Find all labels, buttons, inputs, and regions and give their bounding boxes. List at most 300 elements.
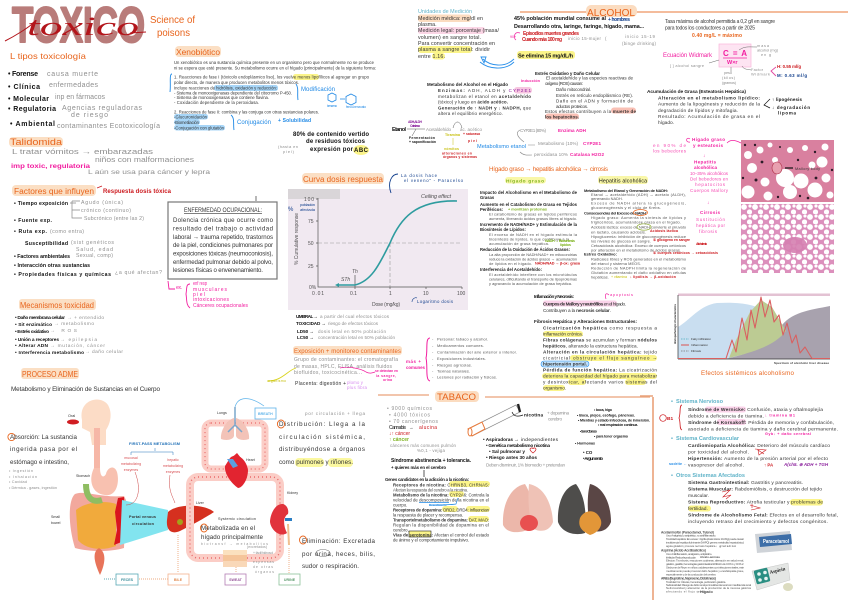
panel: fibrosis hepatica: hepáticos, alterando la estructura hepática. (543, 344, 638, 348)
panel: tasa maxima de alcohol y ecuacion de Widmark: (kilos) (722, 75, 736, 80)
notes: nicotina: cerebro (548, 416, 562, 422)
panel: factores que influyen: crónico (continuo) (81, 208, 131, 214)
text block: metabolizada: expensas (253, 560, 274, 564)
panel: xenobiotico: 1. Reacciones de fase I (tóxicolo endoplásmico liso), los vuelve menos lipofílicos al agregar un grupo (174, 74, 370, 80)
list: fuentes de exposicion: - (432, 374, 434, 380)
panel: exposicion y monitoreo contaminantes: organismo (267, 379, 286, 383)
portal venous circulation: circulation (132, 522, 155, 526)
text block: farmacos analgesicos: Efectos: Trombosis, reacciones cutáneas, alteración en salud renal, (666, 558, 744, 562)
list: umbral toxicidad: LC50 → (297, 335, 314, 340)
notes: progresion higado graso a cirrosis: ↓ (703, 153, 705, 158)
panel: estres oxidativo: Estos efectos contribuyen a la muerte de (545, 109, 636, 114)
panel: genes candidatos (385, 477, 490, 542)
notes: progresion higado graso a cirrosis: Cuerpos Mallory (690, 188, 729, 193)
output boxes: BILE (174, 578, 183, 582)
notes: progresion higado graso a cirrosis: y esteatosis (693, 143, 723, 148)
list: fuentes de exposicion (406, 336, 517, 381)
title: Toxico: toxico (27, 12, 139, 41)
chart: curva dosis respuesta: 0.01 (312, 291, 324, 297)
panel: acumulacion de grasa: degradación de lípidos y mitofagia. (658, 108, 738, 114)
text block: absorcion: • Cavidad (9, 480, 27, 484)
panel: hepatitis alcoholica: Cetoacidosis alcohólica: Exceso de cuerpos cetónicos (591, 243, 686, 248)
skin (223, 550, 247, 567)
chart: curva dosis respuesta: 100 (457, 291, 466, 297)
panel: hepatitis alcoholica: los niveles de glucosa en sangre. (591, 238, 651, 244)
chart: curva dosis respuesta: 0% (309, 285, 317, 291)
panel: tipos toxicologia (8, 51, 160, 130)
panel: inflamacion y necrosis: Contribuyen a la necrosis celular. (543, 308, 611, 313)
panel: genes candidatos: de ánimo y el comportamiento impulsivo. (393, 538, 469, 542)
panel: tasa maxima de alcohol y ecuacion de Widmark (663, 19, 807, 85)
panel: hepatitis alcoholica: Acidosis láctica (650, 229, 679, 233)
panel: xenobiotico: Incluye reacciones de hidrólisis, oxidación y reducción: (174, 86, 277, 90)
first-pass metabolism: metabolizing (121, 462, 141, 466)
heading: efectos sistemicos alcoholismo: Efectos sistémicos alcoholismo (701, 370, 795, 377)
annotation: ejemplos ocupacionales: musculares (193, 287, 228, 293)
chart: spectrum of alcoholic liver disease: Fatty infiltration (691, 337, 711, 341)
panel: higado graso: Interferencia del Acetaldehído: (480, 267, 542, 272)
panel: inflamacion y necrosis (534, 292, 633, 313)
callout: enfermedad ocupacional: de la piel, condiciones pulmonares por (173, 242, 273, 249)
chart: spectrum of alcoholic liver disease (673, 294, 830, 365)
notes: progresion higado graso a cirrosis (653, 137, 741, 234)
text block: metabolizada: Metabolizada en el (201, 525, 255, 532)
panel: tipos toxicologia: • Regulatoria (8, 106, 56, 113)
panel: higado graso: Incremento de NADH/NAD+ y Estimulación de la (480, 222, 578, 227)
sistema nervioso (660, 399, 838, 436)
notes: cancer y organos: • CO (583, 450, 593, 455)
image: caja de aspirina (752, 563, 793, 591)
diagram: etanol pathway: Metabolismo (10%) (538, 141, 578, 146)
panel: acumulacion de grasa: Resultado: Acumulación de grasa en el (658, 114, 760, 120)
panel: higado graso: NADH → Biosíntesis (545, 239, 575, 243)
panel: unidades de medicion: Unidades de Medición (418, 9, 472, 15)
text block: distribucion: circulación sistémica, (279, 434, 365, 441)
notes: progresion higado graso a cirrosis: Cirrosis (700, 210, 720, 215)
panel: fibrosis hepatica: inflamación crónica. (543, 332, 583, 336)
panel: hepatitis alcoholica: Metabolismo del Etanol y Generación de NADH: (584, 188, 668, 193)
panel: hepatitis alcoholica: ① cuerpos cetónicos → cetoacidosis (653, 250, 718, 255)
text block: farmacos analgesicos: Inhibición: Reduce la producción (666, 556, 696, 560)
panel: tasa maxima de alcohol y ecuacion de Widmark: [ ] alcohol sangre (670, 63, 704, 68)
panel: hepatitis alcoholica: Reducción de NADPH limita la regeneración de (591, 266, 686, 270)
diagram: ADME anatomy (51, 399, 300, 585)
panel: estres oxidativo: Estrés en retículo endoplásmico (RE). (556, 93, 633, 98)
panel: xenobiotico: - Coxidación dependiente de la peroxidasa. (174, 100, 259, 105)
sistema nervioso: B1 (667, 416, 673, 422)
panel: higado graso: aumenta, liberando ácidos grasos libres al hígado. (489, 216, 577, 221)
panel: acumulacion de grasa: hígado. (658, 120, 674, 126)
text block: farmacos analgesicos: Toxicidad Hepática: En exceso >4g/día (dosis tóxica: 10-15g) puede causar (666, 537, 744, 541)
list: fuentes de exposicion: Contaminación del aire exterior o interior. (437, 350, 517, 354)
heading: metabolismo y eliminacion: Metabolismo y Eliminación de Sustancias en el Cuerpo (11, 386, 160, 393)
diagram: etanol pathway: ác. acético (460, 127, 483, 132)
heart: Heart (246, 458, 255, 462)
panel: tipos toxicologia: de riesgo (71, 112, 108, 119)
panel: hepatitis alcoholica: Glutatión aumentando el daño oxidativo en células (591, 270, 686, 275)
notes: cancer y organos: • Mientras y estado infecciosa, de inmersión. (578, 418, 650, 422)
image: histologia higado graso: Mallory body (795, 167, 820, 171)
text block: metabolizada: órganos (255, 570, 274, 574)
text block: farmacos analgesicos (661, 530, 751, 594)
sistema nervioso: Síndrome de Wernicke: Confusión, ataxia y oftalmoplejía (688, 407, 823, 413)
panel: xenobiotico: + Solubilidad (278, 118, 311, 124)
panel: xenobiotico: Conjugación (237, 120, 271, 126)
sistema cardiovascular: ↑ PA (764, 462, 774, 468)
heading: tabaco: TABACO (437, 392, 476, 402)
chart: curva dosis respuesta: Curva dosis respuesta (303, 175, 384, 184)
list: fuentes de exposicion: más + (406, 359, 421, 364)
panel: mecanismos toxicidad: → metabolismo (54, 321, 94, 327)
callout: enfermedad ocupacional: laboral → trauma repetido, trastornos (173, 234, 273, 241)
text block: farmacos analgesicos: Nefrotoxicidad: Riesgo de daño renal por insuficiencia renal con insuficiencia renal (666, 583, 751, 587)
notes: tabaco quimicos: • 70 cancerígenos (389, 419, 438, 425)
panel: unidades de medicion: volumen) en sangre total. (418, 35, 481, 41)
panel: fibrosis hepatica: Fibras colágenas se acumulan y forman nódulos (543, 338, 657, 342)
panel: higado graso: Hígado graso (506, 178, 544, 184)
panel: higado graso: El exceso de NADH en el hígado estimula la (489, 232, 578, 237)
panel: exposicion y monitoreo contaminantes: plus fibra (347, 385, 368, 390)
callout: enfermedad ocupacional: lesiones físicas o envenenamiento. (173, 267, 263, 274)
panel: higado graso: Periféricos: (480, 207, 503, 212)
icon: cigarette (468, 404, 520, 436)
list: fuentes de exposicion: Exposiciones industriales. (437, 356, 486, 361)
notes: progresion higado graso a cirrosis: Hepatitis (694, 160, 716, 164)
first-pass metabolism: metabolizing (163, 464, 183, 468)
chart: curva dosis respuesta: Th (352, 269, 358, 275)
annotation: ejemplos ocupacionales: piel (193, 292, 205, 298)
panel: hepatitis alcoholica: Acidosis láctica: exceso de NADH convierte el piruvato (591, 224, 686, 230)
panel: acumulacion de grasa: ↑ lipogénesis (772, 97, 803, 102)
image: caja de paracetamol (755, 531, 792, 553)
chart: spectrum of alcoholic liver disease: Fibrosis (691, 349, 702, 353)
subtitle: science of poisons (150, 14, 195, 39)
text block: absorcion: • Ingestión (9, 469, 33, 473)
sistema cardiovascular: Hipertensión: Aumento de la presión arterial por el efecto (688, 456, 828, 462)
sistema nervioso: ↓ tiamina B1 (765, 414, 795, 418)
lungs (217, 399, 276, 440)
panel: xenobiotico: Un xenobiótico es una sustancia química presente en un organismo pero que normalmente no se produce (174, 60, 375, 65)
text block: farmacos analgesicos: Toxicidad: Gi: Úlceras, hemorragia, perforación gástrica. (666, 580, 726, 584)
diagram: etanol pathway: Metabolismo etanol (477, 144, 526, 150)
subtitle: science of poisons: Science of (150, 14, 195, 26)
panel: exposicion y monitoreo contaminantes: Placenta: digestión + (295, 381, 346, 387)
text block: eliminacion: sudor o respiración. (302, 563, 359, 570)
panel: mecanismos toxicidad: → daño celular (85, 349, 123, 355)
digestive tract: Small (51, 515, 60, 519)
panel: factores que influyen (12, 185, 172, 278)
sistema nervioso: asociado a deficiencia de tiamina y daño cerebral permanente. (688, 426, 838, 432)
panel: hepatitis alcoholica: en lactato, causando acidosis. (591, 230, 646, 234)
panel: unidades de medicion: Medición legal: porcentaje (masa/ (418, 28, 500, 34)
kidney (270, 491, 298, 545)
panel: acumulacion de grasa (647, 89, 810, 126)
callout: enfermedad ocupacional: resultado del trabajo o actividad (173, 226, 273, 232)
panel: tasa maxima de alcohol y ecuacion de Widmark: M: 0.63 ml/g (777, 73, 807, 78)
text block: farmacos analgesicos: Síndrome de Reye: en niños y adolescentes con infecciones virales, este (666, 566, 744, 570)
panel: talidomida: L aún se usa para cáncer y lepra (88, 169, 210, 176)
panel: hepatitis alcoholica: gluconeogénesis y el ciclo de Krebs. (591, 205, 661, 210)
text block: farmacos analgesicos: agota glutatión; provoca necrosis hepática. (666, 544, 716, 548)
heading: tabaco (378, 391, 653, 600)
panel: higado graso: La alta proporción de NADH/NAD+ en mitocondrias (489, 252, 577, 257)
panel: exposicion y monitoreo contaminantes: Grupo de contaminantes: el cromatografía (294, 357, 398, 363)
list: umbral toxicidad: a partir del cual efectos tóxicos (320, 314, 390, 319)
panel: unidades de medicion: Para convertir concentración en (418, 41, 495, 47)
notes: nicotina: nicotina (524, 412, 543, 418)
head and esophagus (67, 400, 111, 470)
text block: metabolizada: (excretados) (247, 545, 267, 549)
systemic circulation (190, 423, 280, 558)
notes: consumo de alcohol: inicio 15-mujer (568, 36, 602, 41)
panel: xenobiotico: polar directo, de manera que producen metabolitos menos tóxicos. (174, 80, 299, 85)
diagram: etanol pathway: Fermentación (409, 136, 435, 140)
panel: mecanismos toxicidad: • Daño membrana celular (15, 315, 65, 321)
otros sistemas afectados: fertilidad. (688, 506, 708, 512)
notes: progresion higado graso a cirrosis: Del bebedores en (690, 176, 728, 182)
otros sistemas afectados: muscular. (688, 493, 709, 499)
panel: acumulacion de grasa: ↓ degradación (772, 105, 810, 110)
panel: mecanismos toxicidad: → epilepsia (60, 337, 97, 343)
panel: xenobiotico: fenol-benzoato (346, 105, 366, 109)
panel: acumulacion de grasa: lipoma (778, 110, 797, 116)
note: 80% residuos toxicos (278, 132, 369, 155)
text block: distribucion: distribuyéndose a órganos (279, 446, 365, 453)
note: 80% residuos toxicos: ABC (354, 148, 369, 154)
otros sistemas afectados: • (671, 473, 673, 479)
image: pulmon sano (503, 484, 553, 532)
panel: tipos toxicologia: causa muerte (47, 71, 98, 78)
first-pass metabolism: enzymes (124, 468, 138, 472)
notes: tabaco quimicos: Cannabis (389, 425, 406, 431)
text block: farmacos analgesicos: ↓ Hígado (697, 590, 714, 594)
panel: tipos toxicologia: • Clínica (8, 84, 40, 91)
chart: curva dosis respuesta: afectada (300, 207, 316, 212)
heading: proceso ADME: PROCESO ADME (22, 370, 78, 379)
panel: xenobiotico: Xenobiótico (176, 48, 221, 57)
panel: genes candidatos: Metabolismo de la nicotina: CYP2A6: Controla la (393, 492, 490, 498)
notes: cancer y organos: • boca, higo (594, 408, 613, 412)
panel: metabolismo del alcohol en el higado: Metabolismo del Alcohol en el Hígado (427, 82, 508, 87)
panel: genes candidatos: Genes candidatos en la adicción a la nicotina: (385, 477, 470, 482)
panel: estres oxidativo: Daño en el ADN y formación de (556, 98, 633, 104)
panel: unidades de medicion: plasma. (418, 22, 437, 28)
diagram: etanol pathway: vómitos (444, 147, 459, 151)
annotation: ejemplos ocupacionales: ex. (176, 285, 182, 291)
sistema cardiovascular: Cardiomiopatía Alcohólica: Deterioro del músculo cardíaco (688, 443, 830, 449)
panel: tasa maxima de alcohol y ecuacion de Widmark: 0.40 mg/L = máximo (692, 33, 742, 39)
panel: tipos toxicologia: • Forense (8, 71, 38, 78)
panel: unidades de medicion (418, 9, 500, 60)
panel: estres oxidativo: Estrés Oxidativo y Daño Celular (535, 71, 600, 76)
text block: metabolizada: + fácil/hidrosol (253, 551, 273, 555)
text block: farmacos analgesicos: afectando el flujo renal. (666, 590, 706, 594)
diagram: etanol pathway: Etanol (392, 127, 406, 133)
panel: higado graso: y agravando la acumulación de grasa hepática. (489, 281, 572, 286)
diagram: etanol pathway: Catalasa (410, 124, 420, 128)
diagram: etanol pathway: Enzima ADH (558, 128, 587, 133)
notes: progresion higado graso a cirrosis: fibrosis (699, 229, 718, 234)
panel: genes candidatos: velocidad de descomposición de la nicotina en el (393, 498, 489, 502)
first-pass metabolism: FIRST-PASS METABOLISM (129, 441, 180, 446)
panel: hepatitis alcoholica: Consecuencias del Exceso de NADH: (584, 210, 647, 216)
panel: genes candidatos: Receptores de nicotina: CHRNB3, CHRNA5: (393, 482, 489, 488)
sistema cardiovascular: sodrite ← (669, 462, 687, 466)
notes: progresion higado graso a cirrosis: Hígado graso (692, 137, 725, 142)
notes: cancer y organos (575, 408, 650, 461)
liver (167, 501, 214, 532)
text block: farmacos analgesicos: ↓ glutatión (716, 544, 736, 548)
diagram: etanol pathway: peroxidasa 10% (534, 152, 568, 157)
panel: tipos toxicologia: L tipos toxicología (10, 51, 86, 61)
panel: talidomida: L tratar vómitos → embarazadas (12, 147, 153, 156)
text block: farmacos analgesicos: Aspirina (Ácido Acetilsalicílico) (661, 548, 706, 552)
panel: factores que influyen: Factores que influyen (14, 187, 94, 196)
otros sistemas afectados: incluyendo retraso del crecimiento y defectos congénitos. (688, 519, 828, 525)
panel: higado graso: celulares, dificultando el transporte de lipoproteínas (489, 276, 577, 282)
chart: curva dosis respuesta: 100 (304, 197, 314, 203)
image: caja de aspirina: Aspirin (769, 567, 786, 576)
notes: consumo de alcohol: Cuando más 100 mg (522, 37, 562, 43)
panel: genes candidatos: la respuesta de placer y recompensa. (393, 512, 463, 518)
sistema cardiovascular: por toxicidad del alcohol. (688, 450, 749, 456)
panel: fibrosis hepatica: Pérdida de función hepática: La cicatrización (543, 368, 657, 372)
output boxes: URINE (284, 578, 296, 582)
chart: curva dosis respuesta: 0.1 (350, 291, 357, 297)
panel: tipos toxicologia: inp en fármacos (55, 94, 106, 101)
notes: nicotina: Deben disminuir, 1% biomedio + pretendan (486, 462, 565, 468)
panel: factores que influyen: Respuesta dosis tóxica (103, 189, 172, 195)
panel: hepatitis alcoholica: hepáticas. (591, 274, 609, 280)
sistema cardiovascular (669, 436, 830, 468)
panel: exposicion y monitoreo contaminantes: la sangre, (376, 374, 396, 378)
panel: hepatitis alcoholica: generando NADH. (591, 196, 623, 201)
text block: eliminacion (300, 536, 376, 570)
panel: genes candidatos: cerebro. (393, 528, 409, 532)
notes: progresion higado graso a cirrosis: hepatocitos (695, 182, 726, 187)
text block: farmacos analgesicos: AINEs (Ibuprofeno, Naproxeno, Diclofenaco) (661, 576, 716, 580)
lungs: BREATH (258, 412, 273, 416)
annotation: ejemplos ocupacionales: Cánceres ocupacionales (193, 303, 248, 309)
notes: consumo de alcohol: Desarrollando otra, laringe, faringe, hígado, mama... (514, 24, 644, 30)
notes: consumo de alcohol: Se elimina 15 mg/dL/h (518, 54, 574, 60)
panel: exposicion y monitoreo contaminantes: biofluidos, toxicocinética... (294, 370, 362, 376)
panel: tasa maxima de alcohol y ecuacion de Widmark: alcohol (mg) (757, 48, 779, 52)
chart: spectrum of alcoholic liver disease: Histopathologic characteristics (673, 304, 677, 344)
callout: enfermedad ocupacional (168, 196, 277, 279)
text block: metabolizada: de otras (253, 565, 273, 569)
panel: factores que influyen: Agudo (única) (81, 200, 123, 206)
panel: tasa maxima de alcohol y ecuacion de Widmark: H: 0.55 ml/g (777, 64, 801, 69)
annotation: la cuarta hace el veneno: La dosis hace (401, 173, 438, 178)
panel: hepatitis alcoholica: Radicales libres y ROS generados en el metabolismo (591, 256, 686, 262)
panel: tasa maxima de alcohol y ecuacion de Widmark: masa (757, 43, 770, 48)
panel: tipos toxicologia: • Molecular (8, 96, 49, 103)
panel: mecanismos toxicidad: → mutación, cáncer (50, 343, 105, 349)
panel: metabolismo del alcohol en el higado: altera el equilibrio energético. (438, 111, 503, 116)
panel: tasa maxima de alcohol y ecuacion de Widmark: (gramos) (722, 80, 737, 85)
text block: farmacos analgesicos: gástrico, gastritis, hemorragias gastrointestinal inhibición de COX-1 y COX-2. (666, 562, 744, 566)
notes: tabaco quimicos (387, 406, 472, 477)
list: fuentes de exposicion: - (432, 368, 434, 374)
diagram: etanol pathway (392, 120, 604, 159)
panel: hepatitis alcoholica (584, 176, 718, 280)
panel: genes candidatos: Afectan la respuesta del cerebro a la nicotina. (393, 488, 468, 492)
panel: fibrosis hepatica: y desintoxicar, afectando varios sistemas del (543, 380, 657, 384)
panel: higado graso: + movilizan proteínas (508, 208, 547, 212)
panel: factores que influyen: Susceptibilidad (25, 241, 68, 247)
panel: fibrosis hepatica: organismo. (543, 386, 566, 390)
panel: exposicion y monitoreo contaminantes: Exposición + monitoreo contaminantes (294, 349, 401, 355)
panel: tasa maxima de alcohol y ecuacion de Widmark: Widmark (751, 72, 770, 76)
panel: tasa maxima de alcohol y ecuacion de Widmark: en g (761, 52, 771, 57)
lungs: Lungs (217, 411, 227, 415)
first-pass metabolism: hepatic (167, 458, 179, 462)
list: fuentes de exposicion: Riesgos agrícolas. (437, 362, 472, 368)
panel: hepatitis alcoholica: ① glicógeno en sangre (653, 237, 690, 242)
text block: eliminacion: por orina, heces, bilis, (302, 551, 375, 558)
panel: metabolismo del alcohol en el higado: Inducción (521, 79, 541, 83)
chart: spectrum of alcoholic liver disease: Inflammation (691, 343, 708, 347)
panel: higado graso: Impacto del Alcoholismo en el Metabolismo de (480, 190, 578, 195)
notes: consumo de alcohol: (binge drinking) (622, 41, 657, 46)
list: fuentes de exposicion: Lesiones por radiación y físicas. (437, 374, 497, 380)
panel: exposicion y monitoreo contaminantes: orina (383, 378, 392, 382)
panel: factores que influyen: • Propiedades físicas y químicas (14, 272, 111, 278)
callout: enfermedad ocupacional: exposiciones tóxicas (neumoconiosis), (173, 250, 273, 258)
panel: genes candidatos: Transporte/metabolismo de dopamina: DAT, MAO: (393, 518, 489, 522)
callout: enfermedad ocupacional: ENFERMEDAD OCUPACIONAL: (184, 207, 262, 214)
list: fuentes de exposicion: comunes (406, 365, 426, 370)
list: fuentes de exposicion: Medicamentos comunes. (437, 343, 484, 348)
chart: curva dosis respuesta: 1 (389, 291, 392, 297)
panel: fibrosis hepatica: cicatricial obstruye el flujo sanguíneo → (543, 356, 657, 360)
text block: farmacos analgesicos: Nefrotoxicidad y alteración de la producción de la mucosa gástrica (666, 586, 751, 590)
panel: xenobiotico: - Sistema de monooxigenasas que contiene flavina. (174, 95, 269, 100)
notes: tabaco quimicos: Síndrome abstinencia + tolerancia. (391, 458, 472, 464)
text block: distribucion: Distribución: Llega a la (279, 421, 366, 428)
panel: tipos toxicologia: contaminantes Ecotoxicología (57, 123, 160, 130)
digestive tract: Stomach (76, 474, 90, 478)
annotation: ejemplos ocupacionales: intoxicaciones (193, 297, 230, 303)
panel: estres oxidativo: El acetaldehído y las especies reactivas de (546, 76, 633, 80)
sistema cardiovascular: vasopresor del alcohol. (688, 462, 744, 468)
callout: enfermedad ocupacional: enfermedad pulmonar debido al polvo, (173, 259, 273, 266)
panel: metabolismo del alcohol en el higado (427, 79, 541, 116)
first-pass metabolism: enzymes (166, 470, 180, 474)
list: umbral toxicidad: concentración letal en 50% población (318, 335, 395, 340)
panel: estres oxidativo: oxígeno (ROS) causan: (545, 81, 583, 86)
panel: estres oxidativo (535, 71, 636, 120)
liver: Liver (196, 501, 205, 505)
panel: xenobiotico: 2. Reacciones de fase II: combina y las conjuga con otras sustancias polares. (174, 110, 319, 114)
notes: progresion higado graso a cirrosis: los bebedores (653, 148, 687, 154)
notes: progresion higado graso a cirrosis: ↓ (707, 200, 709, 205)
notes: tabaco quimicos: alucina (419, 425, 437, 431)
panel: talidomida (9, 137, 210, 176)
diagram: etanol pathway: + saturasa (463, 132, 480, 136)
panel: higado graso: El acetaldehído interfiere con los microtúbulos (489, 272, 577, 277)
otros sistemas afectados (671, 473, 838, 525)
panel: acumulacion de grasa: Aumento de la lipogénesis y reducción de la (658, 102, 760, 108)
list: umbral toxicidad: UMBRAL → (296, 314, 318, 319)
panel: higado graso: Aumento en el Catabolismo de Grasa en Tejidos (480, 202, 578, 207)
notes: tabaco quimicos: + quieres más en el cerebro (391, 465, 446, 470)
chart: curva dosis respuesta: 50 (308, 241, 314, 247)
panel: fibrosis hepatica (534, 319, 657, 391)
text block: absorcion (8, 433, 78, 490)
text block: distribucion: como pulmones y riñones. (279, 459, 353, 466)
